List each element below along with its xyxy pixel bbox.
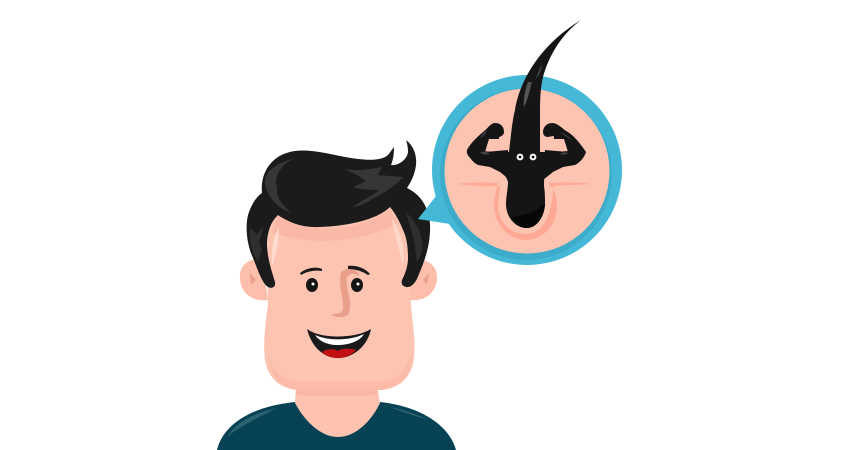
speech bubble: [418, 20, 622, 265]
hair: [247, 140, 430, 288]
right ear: [409, 259, 437, 300]
nose: [331, 269, 360, 317]
scalp circle: [444, 88, 610, 254]
bubble ring: [432, 75, 622, 265]
face: [264, 207, 415, 390]
mouth: [307, 329, 371, 358]
left ear: [240, 259, 268, 300]
hair follicle: [458, 182, 592, 240]
man figure: [217, 140, 456, 450]
right eye: [351, 278, 363, 292]
hair character eyes: [517, 154, 536, 160]
left eyebrow: [300, 268, 322, 275]
muscular hair character: [467, 20, 586, 228]
bubble tail: [418, 196, 450, 224]
left eye: [306, 278, 318, 292]
right eyebrow: [348, 266, 370, 275]
shirt: [217, 402, 456, 450]
neck: [295, 385, 380, 437]
